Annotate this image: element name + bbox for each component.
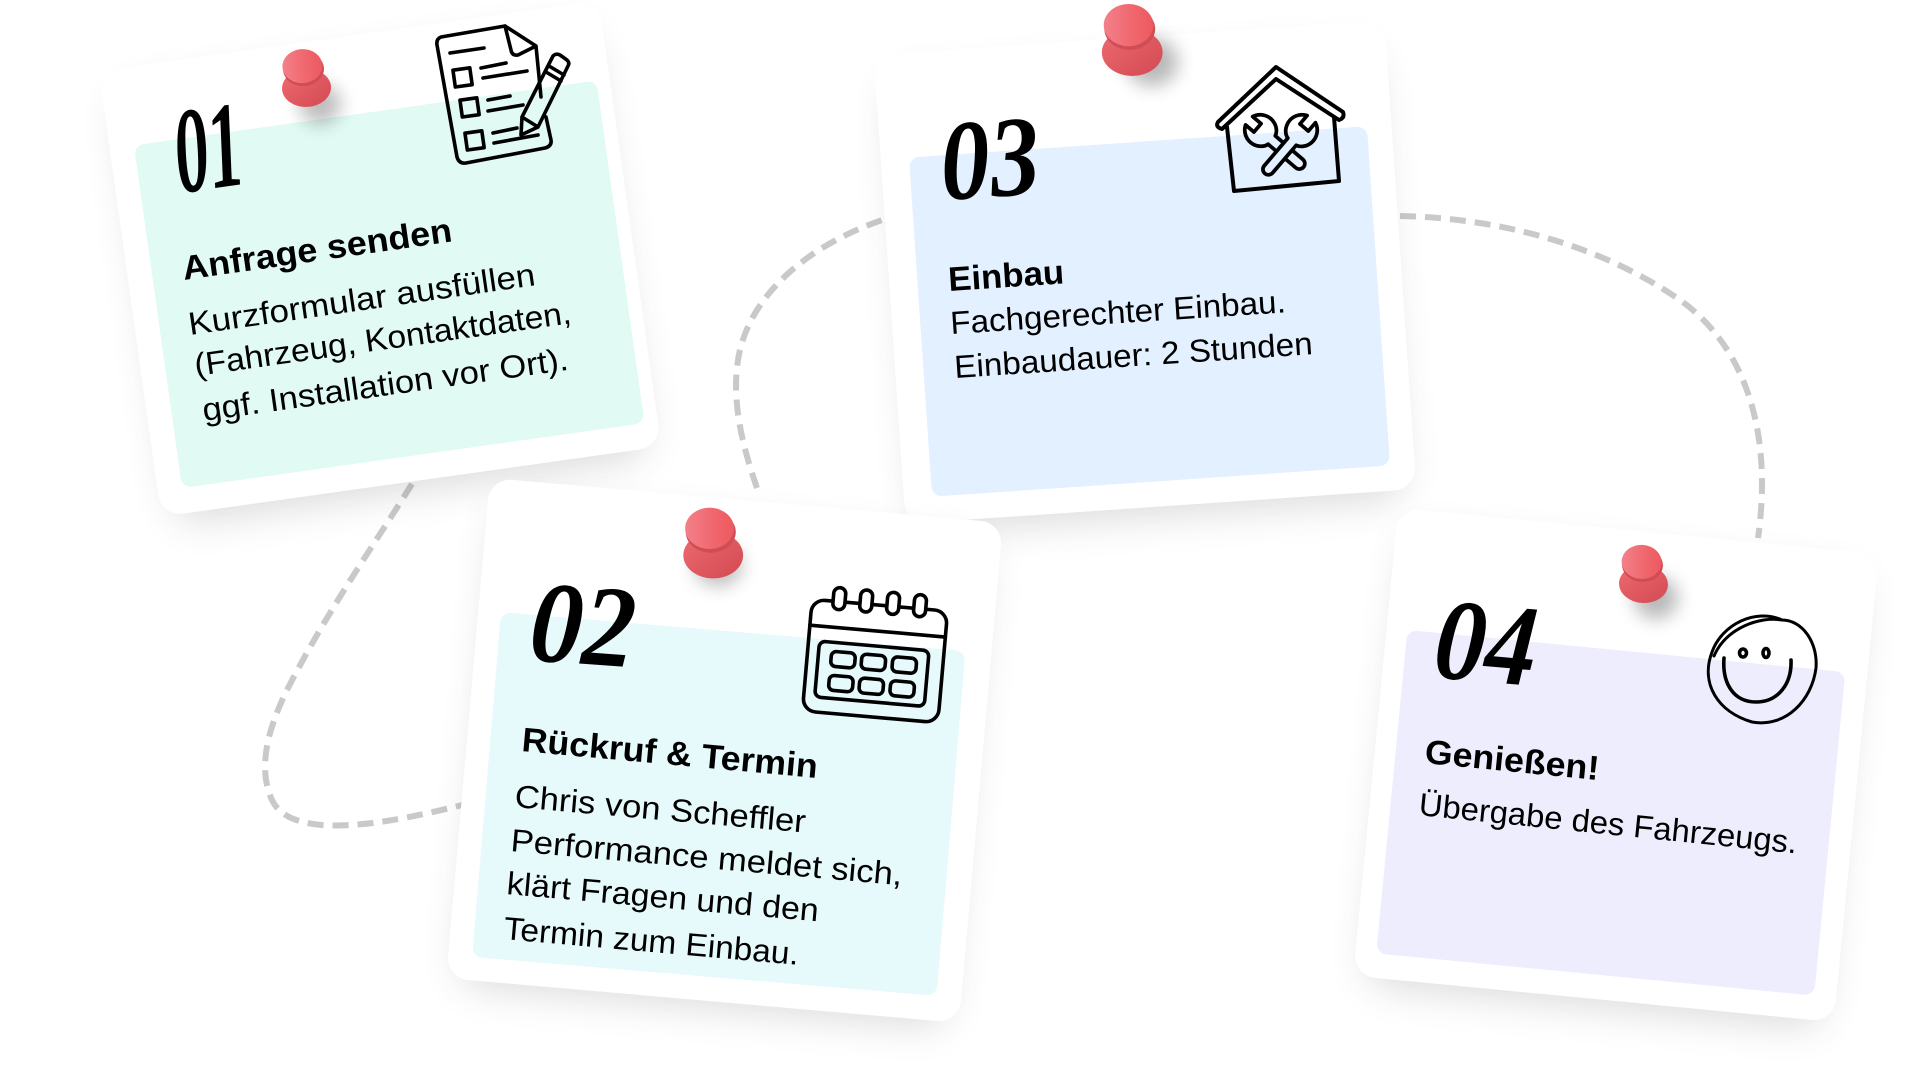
icon: checklist with pencil <box>437 26 569 163</box>
card 03 body: Einbaudauer: 2 Stunden <box>953 325 1314 385</box>
icon: calendar <box>802 585 949 723</box>
card 01 colour panel <box>134 80 645 488</box>
card 02 pin <box>683 508 743 578</box>
card 02 body: klärt Fragen und den <box>505 865 820 928</box>
connector: step 1 to step 2 <box>265 484 466 825</box>
card 03 pin shadow <box>1126 38 1178 86</box>
card 03 shadow <box>889 49 1403 531</box>
card 03: Einbau <box>874 4 1416 531</box>
card 04 body: Übergabe des Fahrzeugs. <box>1417 786 1799 860</box>
card 04 paper <box>1353 508 1879 1022</box>
icon: hand-drawn smiley <box>1708 616 1816 723</box>
icon: house with crossed wrenches <box>1217 67 1344 191</box>
card 02 body: Termin zum Einbau. <box>502 910 800 972</box>
card 02 paper <box>446 478 1003 1023</box>
card 02 body: Performance meldet sich, <box>509 822 904 892</box>
card 03 colour panel <box>909 126 1390 497</box>
card 01 pin shadow <box>299 84 341 124</box>
card 01 number: 01 <box>165 77 251 220</box>
card 04 shadow <box>1366 534 1863 1028</box>
card 01 heading: Anfrage senden <box>180 212 454 288</box>
card 03 heading: Einbau <box>947 253 1065 299</box>
card 04: Genießen <box>1353 508 1879 1028</box>
card 01 body: (Fahrzeug, Kontaktdaten, <box>192 294 573 383</box>
card 01 paper <box>99 1 661 517</box>
card 03 body <box>949 283 1314 385</box>
card 01 shadow <box>117 29 648 523</box>
card 02 body <box>502 778 904 972</box>
card 02 pin shadow <box>694 546 742 586</box>
card 02 colour panel <box>472 612 965 996</box>
card 01 body: ggf. Installation vor Ort). <box>200 341 570 428</box>
card 04 colour panel <box>1376 630 1845 996</box>
card 02 body: Chris von Scheffler <box>513 778 808 839</box>
card 04 pin shadow <box>1634 577 1678 619</box>
card 01 body <box>186 256 573 428</box>
connector: step 2 to step 3 <box>736 218 888 488</box>
card 03 paper <box>874 20 1416 524</box>
card 04 pin <box>1618 544 1670 604</box>
card 01 pin <box>280 48 332 108</box>
card 02 number: 02 <box>526 556 640 692</box>
card 02: Rückruf und Termin <box>446 478 1003 1027</box>
card 04 heading: Genießen! <box>1423 733 1601 788</box>
connector: step 3 to step 4 <box>1400 216 1762 538</box>
card 02 heading: Rückruf & Termin <box>520 721 819 786</box>
card 01: Anfrage senden <box>99 1 661 523</box>
card 03 body: Fachgerechter Einbau. <box>949 283 1287 341</box>
card 03 number: 03 <box>936 93 1044 226</box>
card 04 number: 04 <box>1430 574 1543 711</box>
card 01 body: Kurzformular ausfüllen <box>186 256 537 342</box>
card 02 shadow <box>459 505 987 1027</box>
card 03 pin <box>1102 4 1163 76</box>
